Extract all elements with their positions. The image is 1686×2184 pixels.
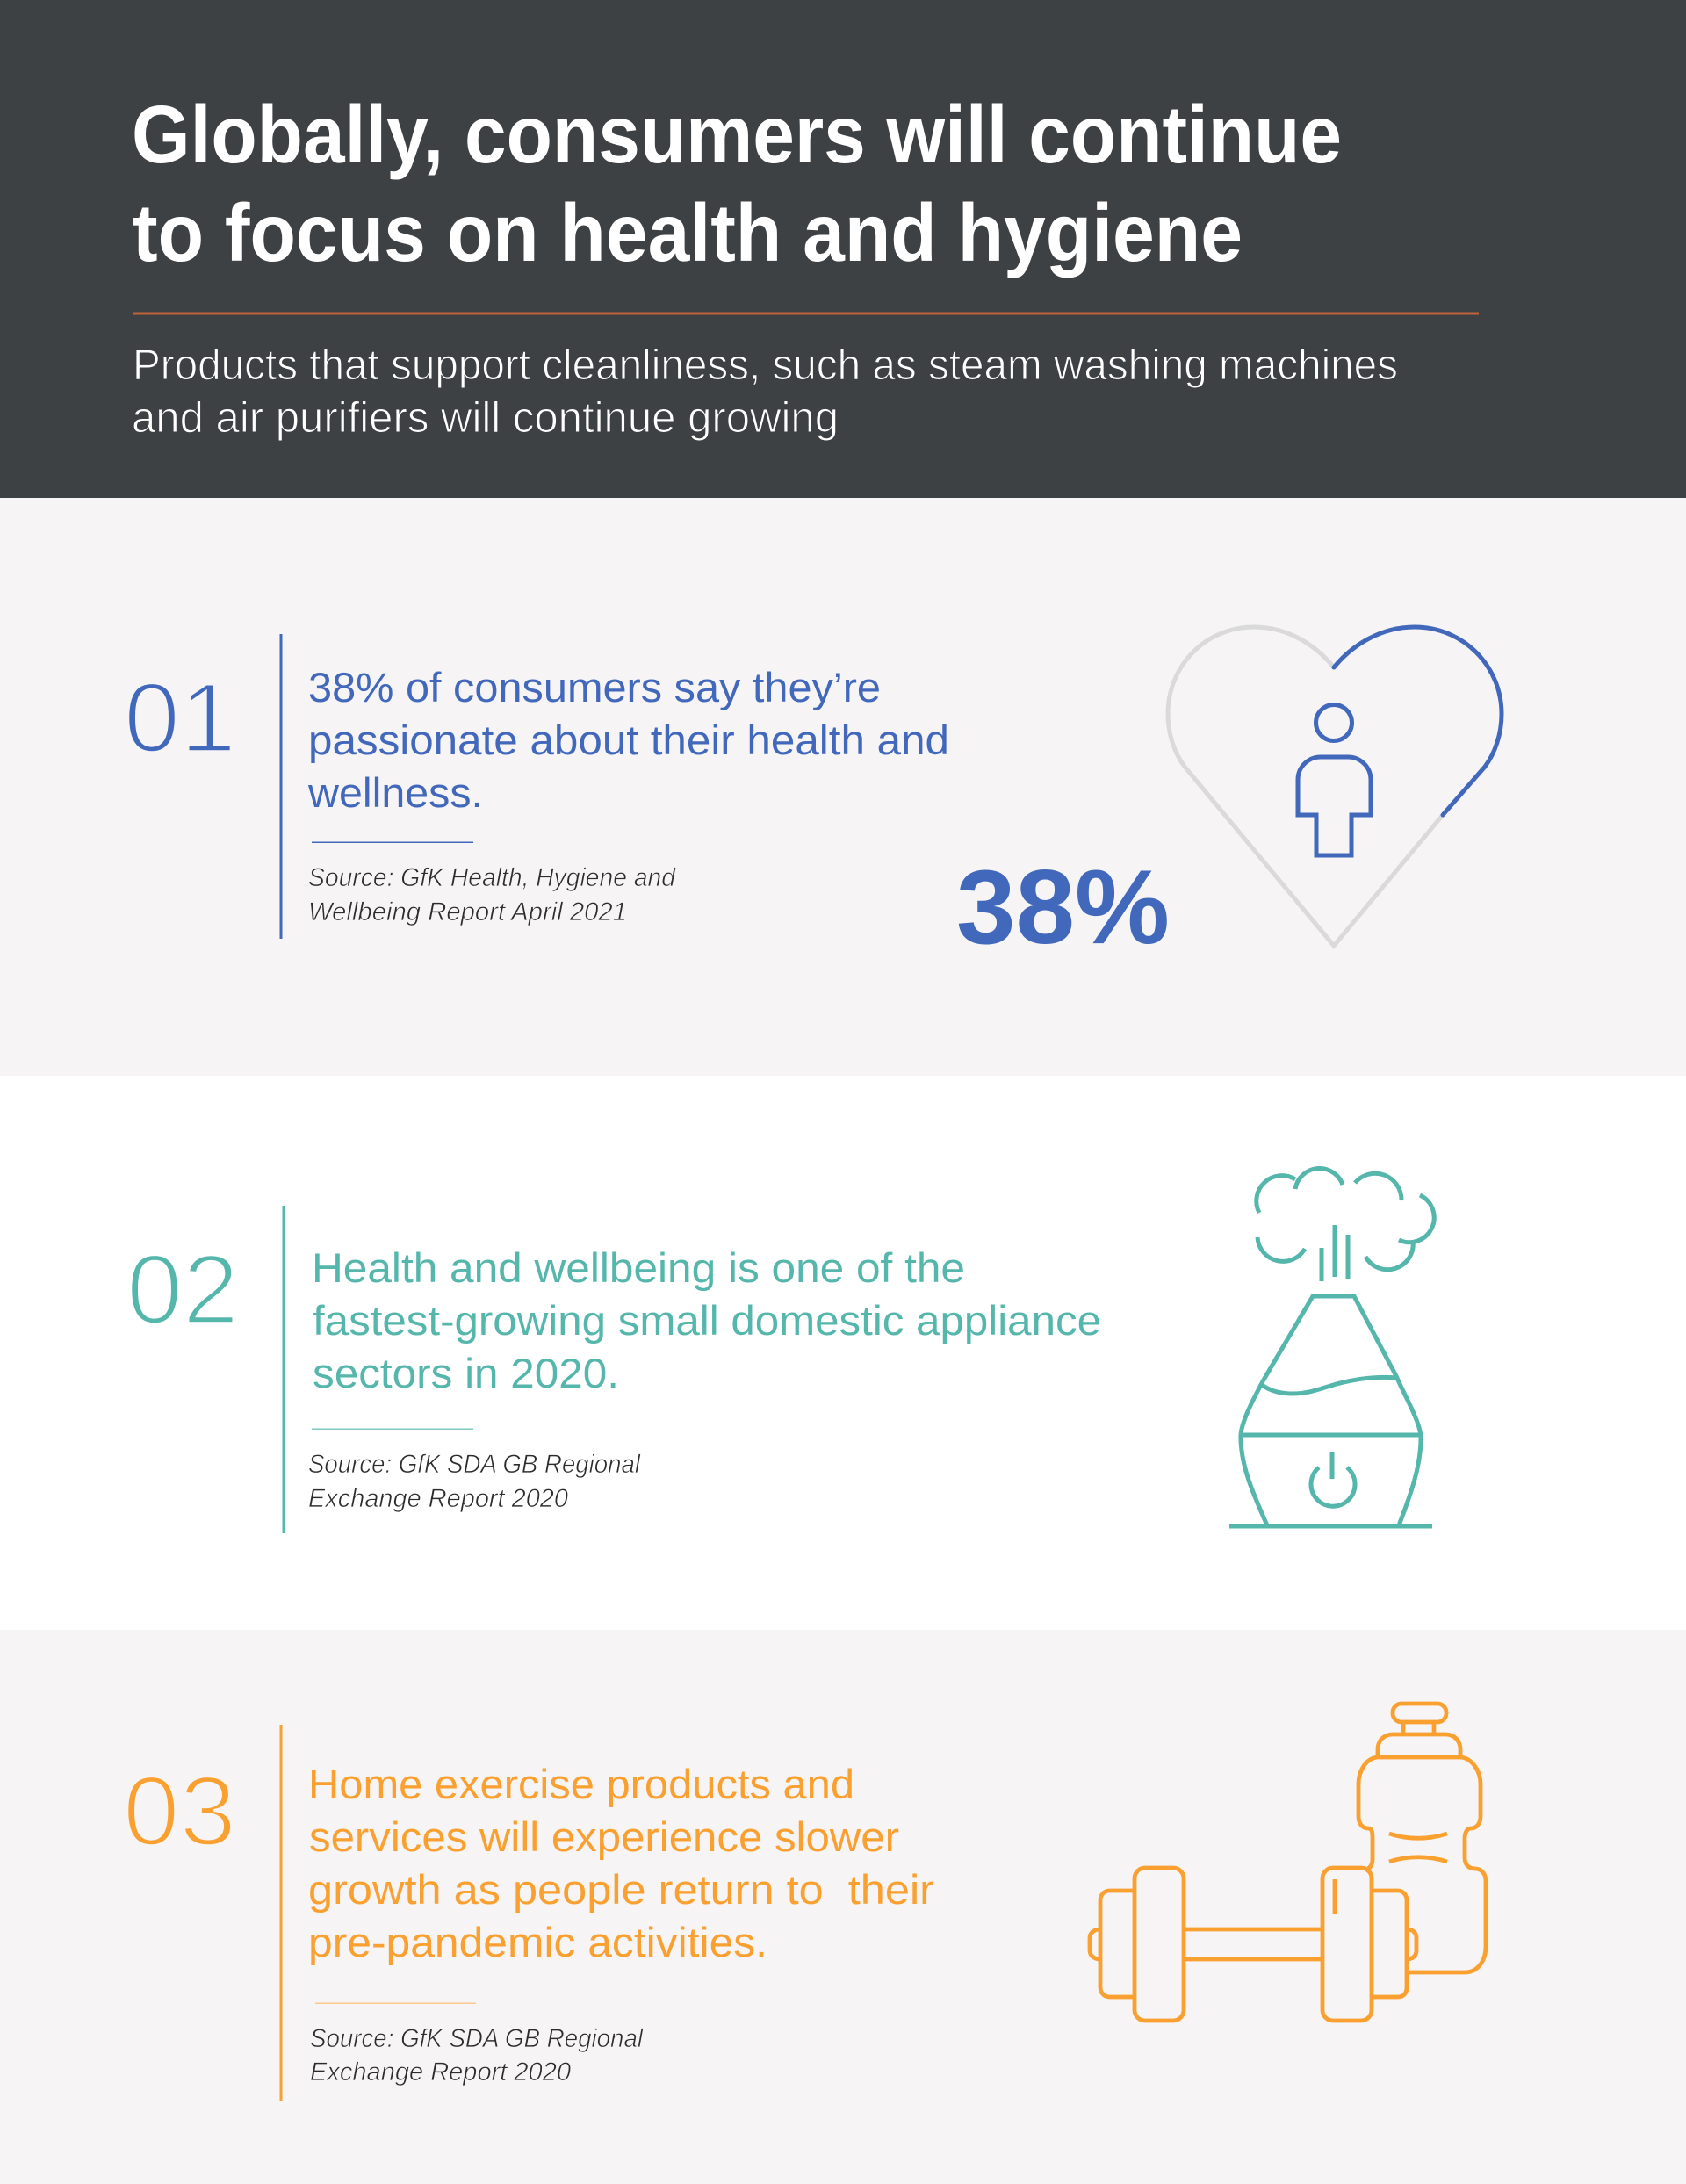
number 01: 01 bbox=[124, 663, 236, 773]
statement text: sectors in 2020. bbox=[313, 1350, 619, 1396]
source note: Source: GfK SDA GB Regional bbox=[310, 2024, 644, 2053]
source note: Source: GfK Health, Hygiene and bbox=[308, 863, 676, 892]
title bbox=[132, 89, 1342, 278]
source note bbox=[308, 863, 676, 926]
statement text: passionate about their health and bbox=[308, 717, 949, 763]
panel: 01 health and wellness bbox=[0, 498, 1686, 1076]
panel: 02 small domestic appliances bbox=[0, 1076, 1686, 1630]
statement text bbox=[312, 1244, 1101, 1396]
statement text: wellness. bbox=[307, 769, 483, 816]
source note: Source: GfK SDA GB Regional bbox=[308, 1450, 641, 1479]
statement text bbox=[308, 1761, 934, 1965]
statement text: pre-pandemic activities. bbox=[308, 1919, 767, 1965]
source note bbox=[308, 1450, 641, 1513]
icon: heart with person bbox=[1168, 627, 1502, 946]
statement text bbox=[307, 664, 949, 816]
title: Globally, consumers will continue bbox=[132, 89, 1342, 180]
source note bbox=[310, 2024, 644, 2087]
statement text: 38% of consumers say they’re bbox=[308, 664, 881, 710]
icon: humidifier with steam bbox=[1229, 1168, 1434, 1526]
statement text: growth as people return to their bbox=[308, 1866, 934, 1913]
statement text: Health and wellbeing is one of the bbox=[312, 1244, 965, 1291]
statement text: fastest-growing small domestic appliance bbox=[313, 1297, 1101, 1344]
statistic 38%: 38% bbox=[956, 848, 1170, 966]
icon: dumbbell and water bottle bbox=[1090, 1704, 1486, 2021]
source note: Exchange Report 2020 bbox=[310, 2058, 571, 2087]
statement text: services will experience slower bbox=[309, 1813, 899, 1860]
statement text: Home exercise products and bbox=[308, 1761, 854, 1807]
source note: Exchange Report 2020 bbox=[308, 1484, 568, 1513]
title: to focus on health and hygiene bbox=[133, 187, 1243, 278]
number 02: 02 bbox=[126, 1235, 239, 1344]
source note: Wellbeing Report April 2021 bbox=[308, 897, 627, 926]
panel: 03 home exercise bbox=[0, 1630, 1686, 2184]
subtitle bbox=[132, 342, 1398, 442]
subtitle: and air purifiers will continue growing bbox=[132, 394, 839, 442]
subtitle: Products that support cleanliness, such as steam washing machines bbox=[133, 342, 1398, 389]
panel: header bbox=[0, 0, 1686, 498]
number 03: 03 bbox=[123, 1756, 236, 1866]
